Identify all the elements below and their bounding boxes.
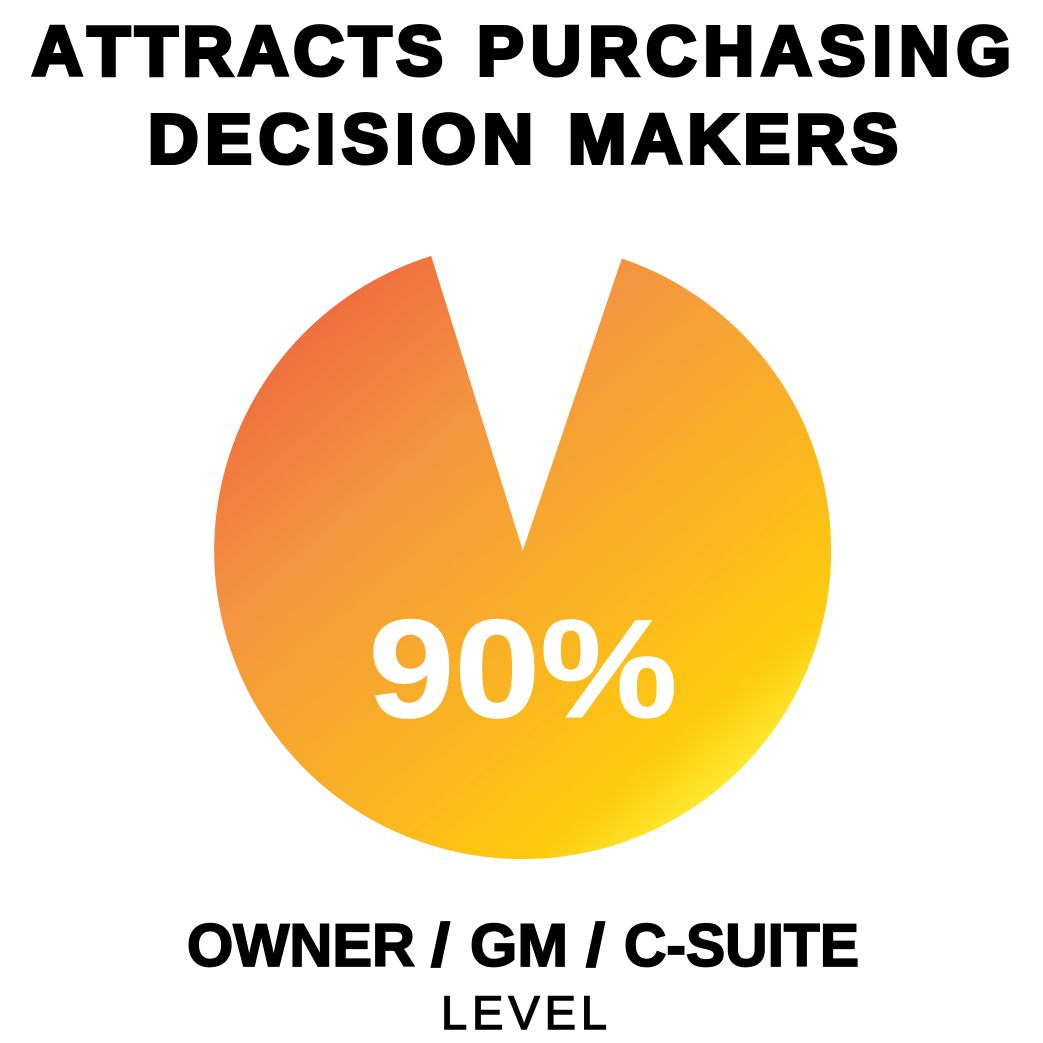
subtitle: owner / GM / C-suite: / [586,912,605,979]
title: DECISION [148,100,533,178]
subtitle: owner / GM / C-suite [187,912,859,979]
caption: level: LEVEL [441,986,607,1039]
title [32,12,1011,178]
subtitle: owner / GM / C-suite: C-SUITE [624,912,859,979]
title: ATTRACTS [32,12,443,90]
subtitle: owner / GM / C-suite: / [431,912,450,979]
percentage value: 90% [368,590,678,747]
pie slice [214,256,831,859]
title: PURCHASING [477,12,1011,90]
subtitle: owner / GM / C-suite: OWNER [187,912,415,979]
title: MAKERS [568,100,898,178]
subtitle: owner / GM / C-suite: GM [470,912,568,979]
